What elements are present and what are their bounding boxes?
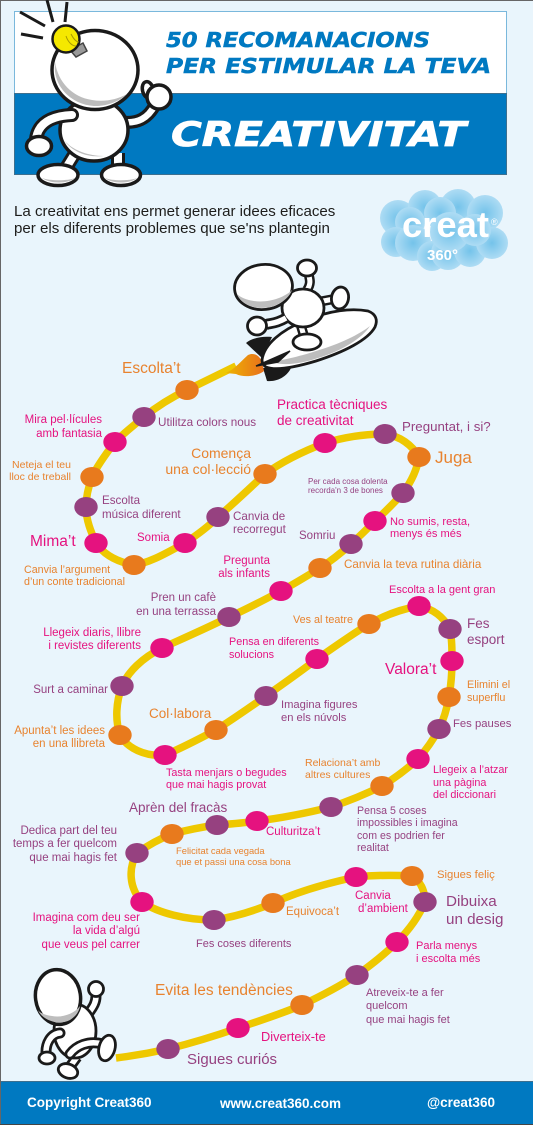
step labels: Escolta’t <box>122 360 181 377</box>
step labels: altres cultures <box>305 769 370 781</box>
logo: creat360: creat <box>402 204 489 245</box>
step labels: que mai hagis fet <box>366 1014 450 1026</box>
step labels: música diferent <box>102 508 181 521</box>
footer: handle: @creat360 <box>427 1095 495 1110</box>
step labels: Atreveix-te a fer <box>366 987 444 999</box>
step labels: Canvia de <box>233 510 285 523</box>
step labels: Mima’t <box>30 533 76 550</box>
step labels: Relaciona’t amb <box>305 757 380 769</box>
step labels: Equivoca’t <box>286 906 340 918</box>
step labels: Canvia <box>355 890 391 902</box>
step labels: del diccionari <box>433 789 496 801</box>
step labels: la vida d’algú <box>73 925 140 937</box>
step labels: Fes <box>467 616 490 631</box>
step labels: No sumis, resta, <box>390 516 470 528</box>
step labels: Aprèn del fracàs <box>129 800 228 815</box>
rocket body <box>262 310 376 369</box>
footer: website: www.creat360.com <box>219 1096 341 1111</box>
icon: light bulb <box>52 26 87 57</box>
step labels: realitat <box>357 842 389 854</box>
title: 50 recomanacions: 50 RECOMANACIONS <box>166 28 430 52</box>
step labels: Comença <box>191 445 251 461</box>
step labels: Dedica part del teu <box>20 825 117 837</box>
step labels: impossibles i imagina <box>357 817 458 829</box>
step labels <box>9 360 512 1068</box>
rocket flame <box>226 354 264 376</box>
step labels: d’ambient <box>358 903 409 915</box>
step labels: Elimini el <box>467 679 510 691</box>
step labels: Practica tècniques <box>277 397 388 412</box>
title: creativitat: CREATIVITAT <box>171 115 469 155</box>
step labels: Fes coses diferents <box>196 938 292 950</box>
step labels: temps a fer quelcom <box>13 838 117 850</box>
step labels: menys és més <box>390 528 462 540</box>
step labels: lloc de treball <box>9 471 71 483</box>
step labels: Surt a caminar <box>33 684 108 696</box>
footer bar <box>1 1081 533 1124</box>
step labels: Pensa 5 coses <box>357 805 426 817</box>
step labels: Ves al teatre <box>293 614 353 626</box>
header panel <box>14 12 506 174</box>
step labels: una col·lecció <box>165 461 251 477</box>
step labels: superflu <box>467 692 505 704</box>
rocket fins <box>246 337 272 358</box>
step labels: un desig <box>446 911 503 928</box>
step labels: Pren un cafè <box>151 592 216 604</box>
step labels: quelcom <box>366 1000 408 1012</box>
footer: copyright: Copyright Creat360 <box>27 1095 152 1110</box>
step labels: Llegeix a l’atzar <box>433 764 508 776</box>
step labels: Sigues curiós <box>187 1051 277 1068</box>
step labels: i escolta més <box>416 953 481 965</box>
step labels: que veus pel carrer <box>42 939 140 951</box>
step labels: que et passi una cosa bona <box>176 856 291 867</box>
step labels: Diverteix-te <box>261 1029 326 1044</box>
step labels: Juga <box>435 448 472 467</box>
step labels: Fes pauses <box>453 718 512 730</box>
rocket character <box>226 260 376 381</box>
step labels: Felicitat cada vegada <box>176 845 265 856</box>
step labels: en una terrassa <box>136 606 217 618</box>
step labels: recorregut <box>233 523 287 536</box>
step labels: Pensa en diferents <box>229 636 320 648</box>
step labels: Col·labora <box>149 706 212 721</box>
step labels: Parla menys <box>416 940 478 952</box>
step labels: que mai hagis provat <box>166 779 266 791</box>
step labels: solucions <box>229 649 275 661</box>
step labels: com es podrien fer <box>357 830 445 842</box>
step labels: Pregunta <box>223 555 271 567</box>
step labels: Culturitza’t <box>266 826 321 838</box>
step labels: en els núvols <box>281 712 347 724</box>
step labels: Canvia la teva rutina diària <box>344 558 482 571</box>
step labels: als infants <box>218 568 270 580</box>
step labels: Mira pel·lícules <box>25 414 102 426</box>
step labels: de creativitat <box>277 413 354 428</box>
intro text: La creativitat ens permet generar idees eficaces <box>14 203 335 220</box>
path: yellow winding road <box>86 366 452 1058</box>
title: per estimular la teva: PER ESTIMULAR LA TEVA <box>166 54 491 78</box>
step labels: que mai hagis fet <box>29 852 118 864</box>
step labels: recorda'n 3 de bones <box>308 486 383 495</box>
step labels: Neteja el teu <box>12 459 71 471</box>
step labels: Imagina figures <box>281 699 358 711</box>
step labels: Valora’t <box>385 661 437 678</box>
step labels: amb fantasia <box>36 428 103 440</box>
logo: creat360: ® <box>491 217 498 227</box>
step labels: Apunta’t les idees <box>14 725 105 737</box>
step labels: i revistes diferents <box>48 640 141 652</box>
step labels: en una llibreta <box>33 738 106 750</box>
step labels: Somia <box>137 532 170 544</box>
step labels: Imagina com deu ser <box>33 912 140 924</box>
step labels: Escolta a la gent gran <box>389 584 495 596</box>
step labels: Evita les tendències <box>155 982 293 999</box>
step labels: una pàgina <box>433 777 486 789</box>
character with light bulb <box>20 0 171 186</box>
logo: creat360 <box>380 189 508 271</box>
step labels: Per cada cosa dolenta <box>308 477 388 486</box>
intro text: per els diferents problemes que se'ns plantegin <box>14 220 330 237</box>
nodes <box>74 380 464 1059</box>
step labels: d’un conte tradicional <box>24 576 125 588</box>
step labels: Llegeix diaris, llibre <box>43 627 141 639</box>
step labels: Somriu <box>299 530 335 542</box>
step labels: Preguntat, i si? <box>402 419 491 434</box>
step labels: esport <box>467 632 505 647</box>
step labels: Tasta menjars o begudes <box>166 767 287 779</box>
step labels: Canvia l’argument <box>24 564 110 576</box>
running character <box>32 967 118 1081</box>
step labels: Dibuixa <box>446 893 497 910</box>
logo: creat360: 360° <box>427 247 458 264</box>
step labels: Escolta <box>102 494 141 507</box>
step labels: Sigues feliç <box>437 869 495 881</box>
step labels: Utilitza colors nous <box>158 416 256 429</box>
